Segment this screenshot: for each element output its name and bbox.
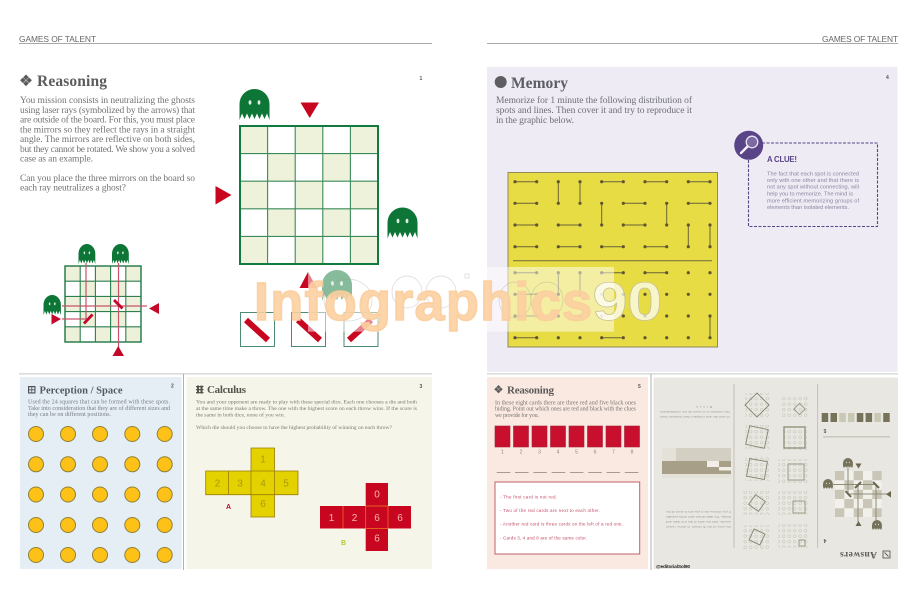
left page header: GAMES OF TALENT — [19, 34, 96, 44]
row of cards — [495, 426, 640, 447]
card numbers — [501, 450, 634, 456]
die net A: 2 — [215, 478, 221, 490]
heading: Reasoning: Reasoning — [37, 73, 107, 90]
die net A — [206, 448, 298, 517]
icon: magnifier — [734, 131, 763, 160]
clue text: not any spot without connecting, will — [767, 184, 859, 190]
icon: squares — [28, 386, 36, 394]
answer text block: the wins of die B shown in white colour — [666, 525, 731, 529]
spots and lines board — [508, 172, 718, 347]
icon: abacus — [196, 386, 204, 394]
card numbers: 1 — [501, 450, 504, 456]
answer text block: The solution is to count all the combinations — [660, 410, 730, 414]
answers heading upside down: Answers — [840, 549, 877, 559]
text block: spots and lines. Then cover it and try to reproduce it — [496, 106, 692, 116]
answer number 5: 5 — [823, 427, 826, 433]
page number 3: 3 — [420, 384, 422, 390]
card numbers: 8 — [631, 450, 634, 456]
text block: they can be on different positions. — [28, 411, 112, 418]
heading: Calculus — [207, 384, 247, 396]
text block: instructions: each ray neutralizes a ghost? — [20, 184, 126, 194]
panel: reasoning cards — [487, 377, 648, 569]
callout: a clue — [734, 131, 878, 226]
answer dotted squares column B — [778, 395, 809, 548]
die net A: 3 — [237, 478, 243, 490]
ghost top — [240, 89, 270, 120]
watermark: 90 — [592, 272, 662, 332]
page number 5: 5 — [638, 384, 641, 390]
text block: in the graphic below. — [496, 116, 574, 126]
clues box: - Two of the red cards are next to each other. — [500, 508, 600, 513]
text block: instructions: angle. The mirrors are reflective on both sides, — [20, 134, 195, 145]
arrow top — [300, 102, 319, 118]
clues box — [495, 482, 640, 554]
answer dotted squares column A — [742, 393, 770, 549]
text block: Which die should you choose to have the highest probability of winning on each throw? — [196, 424, 392, 431]
main puzzle board — [240, 126, 378, 264]
text block: instructions: You mission consists in neutralizing the ghosts — [20, 96, 195, 106]
answer table — [662, 448, 731, 478]
panel: reasoning mirrors puzzle — [20, 73, 422, 356]
clue text: help you to memorize. The mind is — [767, 192, 853, 198]
text block — [496, 95, 693, 126]
mirror tile 3 — [344, 312, 378, 346]
card numbers: 4 — [557, 450, 560, 456]
clues box: - Cards 3, 4 and 8 are of the same color. — [500, 535, 587, 540]
page number 4: 4 — [886, 75, 889, 81]
text block: instructions: Can you place the three mirrors on the board so — [20, 174, 195, 184]
dot grid — [28, 426, 172, 562]
die net B: 0 — [374, 490, 380, 500]
die net B: B — [341, 540, 346, 547]
answer blanks — [497, 472, 638, 474]
text block: instructions — [20, 96, 195, 194]
text block — [28, 398, 170, 418]
text block: You and your opponent are ready to play with these special dice. Each one chooses a die and both — [196, 400, 417, 406]
answer text block: of each die and compare them between them — [660, 415, 730, 419]
icon: memory spot — [495, 76, 507, 88]
answer text block: Block — [696, 405, 712, 409]
clue text: only with one other and that there is — [767, 178, 859, 184]
page number 2: 2 — [171, 384, 174, 390]
die net B: 1 — [329, 513, 335, 524]
answer text block: results, with the wins of die A in dark and — [666, 520, 731, 524]
right page header: GAMES OF TALENT — [822, 34, 898, 44]
answer mirror board — [823, 458, 891, 530]
text block: hiding. Point out which ones are red and black with the clues — [495, 406, 637, 412]
text block: instructions: using laser rays (symbolized by the arrows) that — [20, 105, 195, 116]
clue text — [767, 172, 859, 211]
die net B — [320, 483, 411, 551]
answer text block: throws. The table shows each of the possible — [666, 515, 731, 519]
icon: diamonds — [494, 385, 503, 393]
card numbers: 3 — [538, 450, 541, 456]
arrow bottom — [300, 272, 317, 288]
answer number 4: 4 — [823, 537, 826, 543]
heading: Memory — [511, 75, 568, 92]
card numbers: 6 — [594, 450, 597, 456]
text block: Take into consideration that they are of different sizes and — [28, 405, 170, 412]
heading: Reasoning — [507, 384, 554, 396]
answer text block — [660, 405, 731, 529]
text block: instructions: case as an example. — [20, 154, 93, 164]
die net A: 4 — [260, 478, 266, 490]
answer text block: If you choose die A you win in most of the — [666, 510, 731, 514]
text block: instructions: are outside of the board. For this, you must place — [20, 114, 195, 126]
die net A: 5 — [283, 478, 289, 490]
panel: perception / space — [20, 377, 182, 569]
clue text: The fact that each spot is connected — [767, 172, 859, 178]
mirror tile 1 — [240, 312, 274, 346]
text block: Used the 24 squares that can be formed with these spots. — [28, 398, 170, 406]
clue text: elements than isolated elements. — [767, 205, 849, 211]
panel: memory — [487, 67, 898, 372]
die net A: 6 — [260, 499, 266, 510]
text block: In these eight cards there are three red and five black ones — [495, 400, 637, 406]
arrow left — [216, 186, 232, 204]
card numbers: 5 — [575, 450, 578, 456]
die net B: 6 — [374, 513, 380, 524]
clue heading: A CLUE! — [767, 155, 797, 164]
die net B: 6 — [397, 513, 403, 524]
heading: Perception / Space — [40, 386, 123, 396]
ghost right — [388, 208, 418, 238]
watermark: Infographics — [254, 272, 592, 332]
text block — [495, 400, 637, 419]
die net B: 2 — [352, 513, 358, 524]
card numbers: 2 — [520, 450, 523, 456]
clue text: more efficient memorizing groups of — [767, 198, 859, 204]
clues box: - The first card is not red. — [500, 494, 557, 499]
die net A: 1 — [260, 454, 266, 466]
example solved board — [44, 244, 159, 356]
card numbers: 7 — [612, 450, 615, 456]
panel: answers (upside down) — [654, 378, 898, 570]
die net A: A — [226, 504, 231, 511]
clues box: - Another red card is three cards on the left of a red one. — [500, 522, 623, 527]
credit: @editorialSol90 — [656, 564, 690, 570]
panel: calculus — [186, 377, 432, 569]
text block — [196, 400, 418, 431]
text block: we provide for you. — [495, 412, 540, 419]
text block: at the same time make a throw. The one with the highest score on each throw wins. If the score is — [196, 405, 418, 412]
text block: Memorize for 1 minute the following distribution of — [496, 95, 693, 106]
text block: instructions: but they cannot be rotated. We show you a solved — [20, 145, 195, 155]
page number 1: 1 — [420, 76, 422, 82]
text block: the same in both dice, none of you win. — [196, 412, 286, 418]
die net B: 6 — [374, 534, 380, 544]
answer cards — [822, 413, 890, 437]
mirror tile 2 — [292, 312, 326, 346]
ghost bottom — [322, 270, 352, 301]
text block: instructions: the mirrors so they reflect the rays in a straight — [20, 124, 195, 136]
